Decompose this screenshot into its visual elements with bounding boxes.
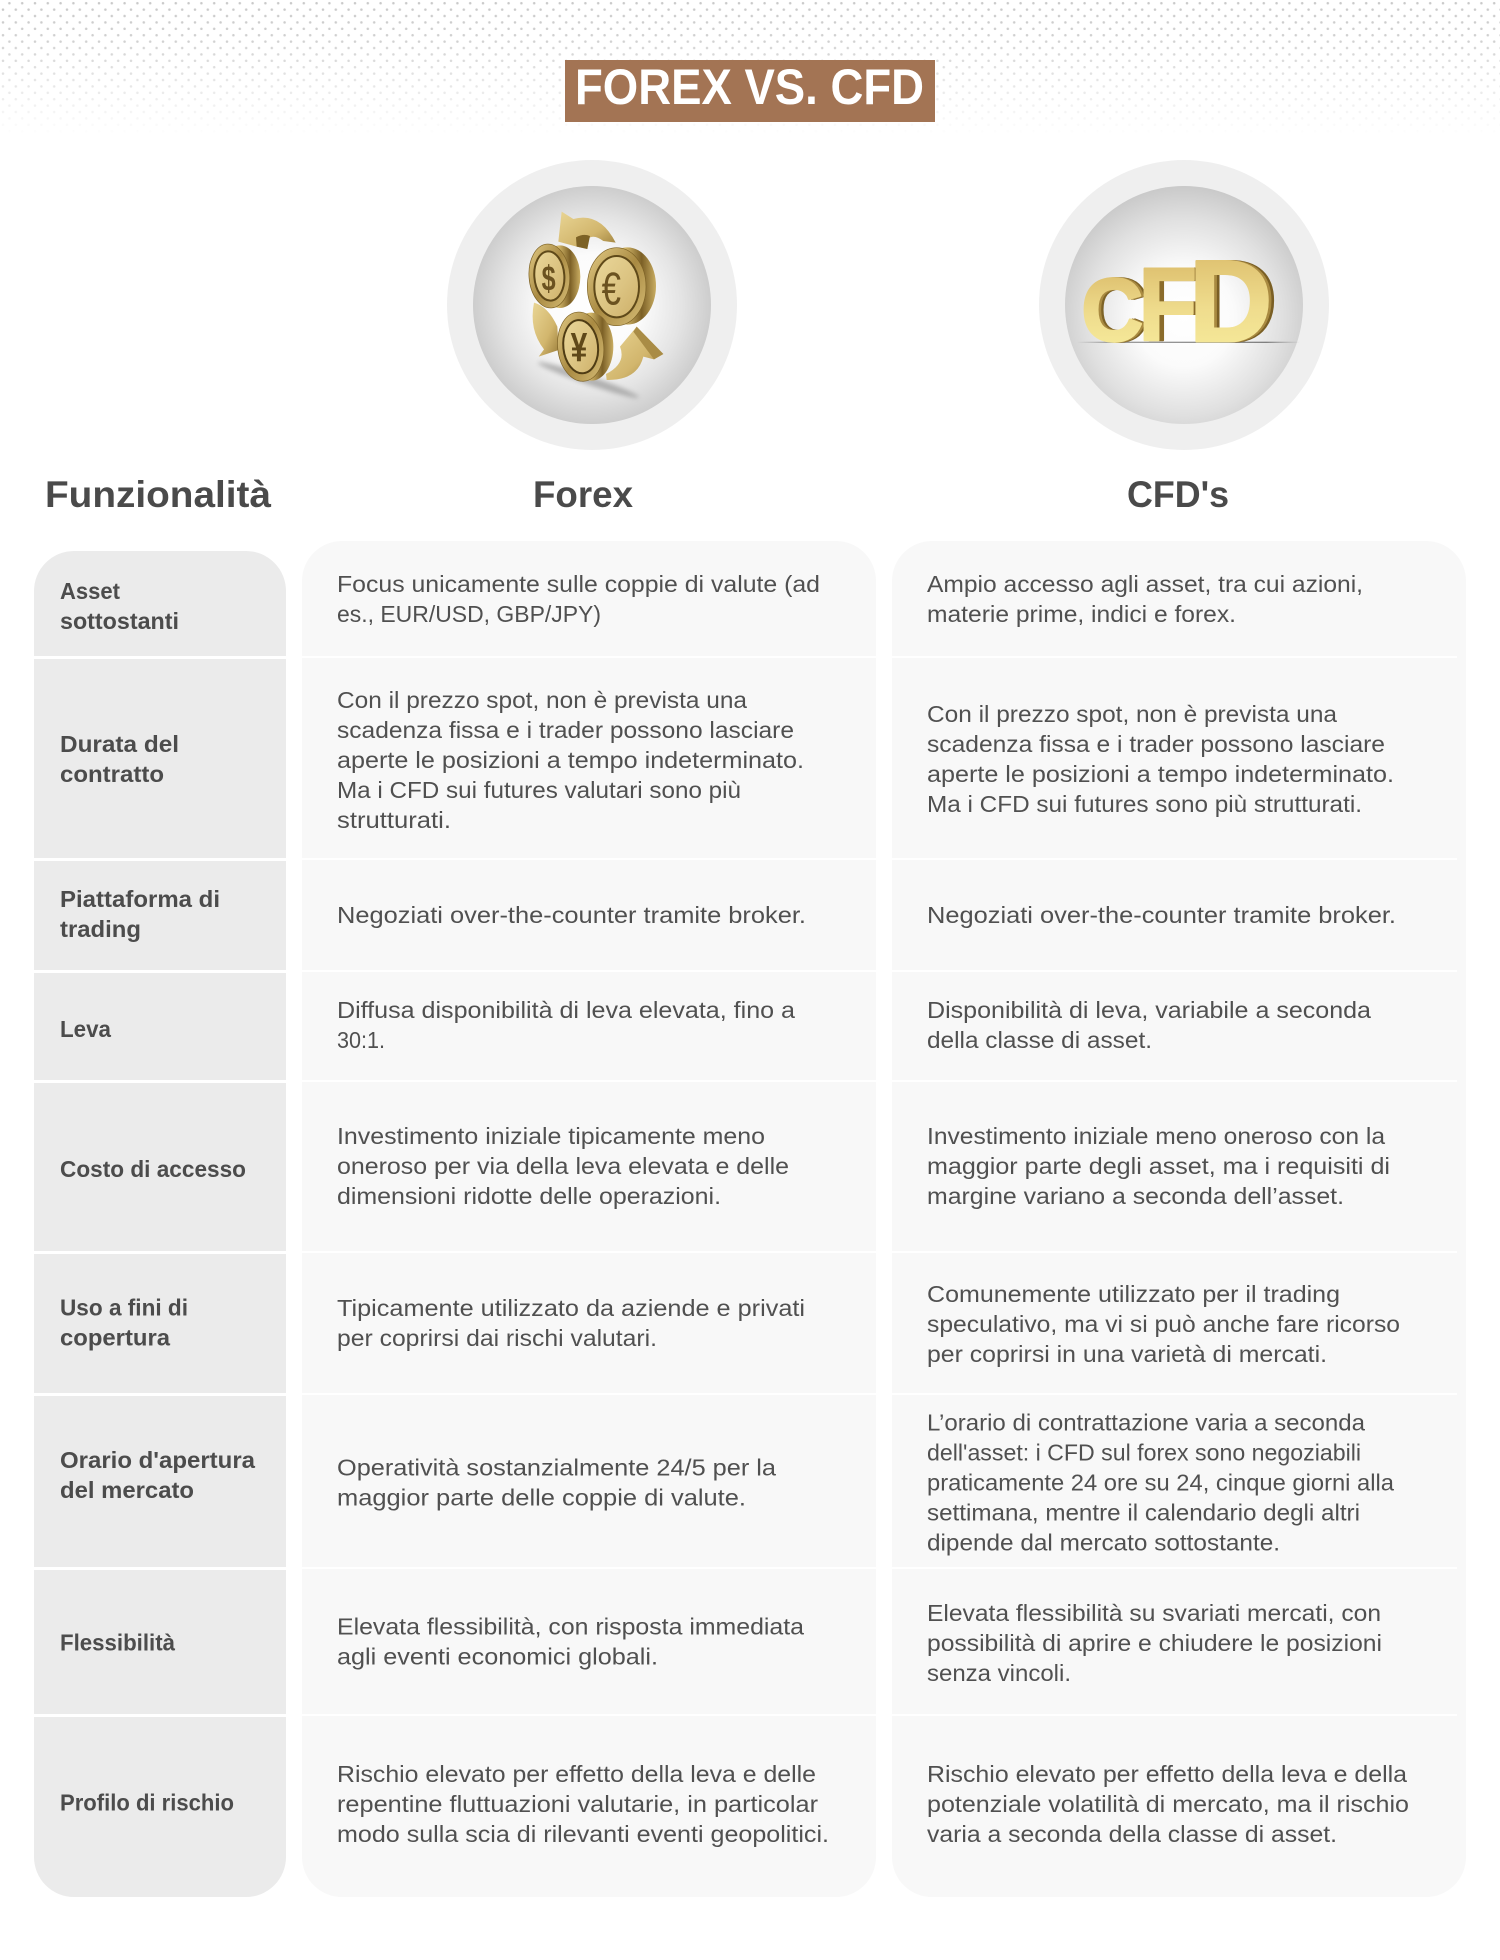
text: Forex durata del contratto <box>337 687 804 833</box>
text: CFD piattaforma: Negoziati over-the-counter tramite broker. <box>927 902 1396 928</box>
text: CFD profilo di rischio: varia a seconda della classe di asset. <box>927 1821 1337 1847</box>
panel: Funzionalità column <box>34 551 286 1897</box>
text: CFD profilo di rischio: Rischio elevato per effetto della leva e della <box>927 1761 1407 1787</box>
text: CFD uso a fini di copertura: speculativo, ma vi si può anche fare ricorso <box>927 1311 1400 1337</box>
text: CFD costo di accesso: maggior parte degli asset, ma i requisiti di <box>927 1153 1390 1179</box>
text: CFD leva: Disponibilità di leva, variabile a seconda <box>927 997 1371 1023</box>
text: Forex leva: Diffusa disponibilità di leva elevata, fino a <box>337 997 795 1023</box>
text: Forex piattaforma: Negoziati over-the-counter tramite broker. <box>337 902 806 928</box>
text: CFD durata del contratto: Ma i CFD sui futures sono più strutturati. <box>927 791 1362 817</box>
icon: CFD gold letters: C <box>1084 259 1146 359</box>
text: Forex leva: 30:1. <box>337 1027 385 1053</box>
text: Forex asset sottostanti: Focus unicamente sulle coppie di valute (ad <box>337 571 820 597</box>
heading: CFD's: CFD's <box>1127 474 1229 515</box>
icon: CFD gold letters: F <box>1143 248 1202 364</box>
text: CFD flessibilità <box>927 1600 1382 1686</box>
text: CFD uso a fini di copertura: Comunemente utilizzato per il trading <box>927 1281 1340 1307</box>
row label: Leva: Leva <box>60 1016 111 1042</box>
text: Forex uso a fini di copertura <box>337 1295 805 1351</box>
row label: Flessibilità: Flessibilità <box>60 1630 175 1656</box>
row label: Piattaforma di trading: trading <box>60 916 141 942</box>
text: CFD asset sottostanti <box>927 571 1363 627</box>
text: Forex orario di apertura: Operatività sostanzialmente 24/5 per la <box>337 1454 776 1480</box>
text: CFD orario di apertura: dell'asset: i CFD sul forex sono negoziabili <box>927 1440 1361 1466</box>
text: CFD flessibilità: Elevata flessibilità su svariati mercati, con <box>927 1600 1381 1626</box>
text: Forex uso a fini di copertura: per coprirsi dai rischi valutari. <box>337 1325 657 1351</box>
icon: CFD gold letters: D <box>1191 235 1275 366</box>
text: CFD durata del contratto: scadenza fissa e i trader possono lasciare <box>927 731 1385 757</box>
row label: Piattaforma di trading: Piattaforma di <box>60 886 220 912</box>
icon: CFD gold letters: C <box>1081 259 1143 359</box>
icon: forex coins: $ <box>542 260 556 299</box>
row label: Profilo di rischio: Profilo di rischio <box>60 1790 234 1816</box>
panel: Forex column <box>302 541 876 1897</box>
row label: Asset sottostanti <box>60 578 179 634</box>
text: CFD flessibilità: possibilità di aprire e chiudere le posizioni <box>927 1630 1382 1656</box>
text: CFD costo di accesso: Investimento iniziale meno oneroso con la <box>927 1123 1385 1149</box>
row label: Asset sottostanti: Asset <box>60 578 120 604</box>
row label: Piattaforma di trading <box>60 886 220 942</box>
text: Forex uso a fini di copertura: Tipicamente utilizzato da aziende e privati <box>337 1295 805 1321</box>
row label: Uso a fini di copertura: copertura <box>60 1324 170 1350</box>
row label: Durata del contratto <box>60 731 179 787</box>
icon: forex coins: € <box>602 262 621 314</box>
text: Forex orario di apertura <box>337 1454 776 1510</box>
text: CFD costo di accesso <box>927 1123 1390 1209</box>
row label: Orario d'apertura del mercato: del mercato <box>60 1477 194 1503</box>
heading: Forex: Forex <box>533 474 633 515</box>
text: CFD orario di apertura: dipende dal mercato sottostante. <box>927 1530 1280 1556</box>
text: Forex costo di accesso: dimensioni ridotte delle operazioni. <box>337 1183 721 1209</box>
text: CFD profilo di rischio: potenziale volatilità di mercato, ma il rischio <box>927 1791 1409 1817</box>
text: CFD asset sottostanti: Ampio accesso agli asset, tra cui azioni, <box>927 571 1363 597</box>
icon: CFD gold letters: D <box>1189 235 1273 366</box>
text: Forex durata del contratto: Ma i CFD sui futures valutari sono più <box>337 777 741 803</box>
title: FOREX VS. CFD <box>575 59 924 115</box>
row label: Uso a fini di copertura <box>60 1294 188 1350</box>
text: Forex flessibilità <box>337 1614 804 1670</box>
row label: Uso a fini di copertura: Uso a fini di <box>60 1294 188 1320</box>
text: Forex costo di accesso: Investimento iniziale tipicamente meno <box>337 1123 765 1149</box>
icon: forex coins: ¥ <box>571 324 588 370</box>
icon: CFD gold letters: D <box>1194 235 1278 366</box>
text: CFD uso a fini di copertura: per coprirsi in una varietà di mercati. <box>927 1341 1327 1367</box>
text: Forex durata del contratto: Con il prezzo spot, non è prevista una <box>337 687 747 713</box>
text: Forex flessibilità: agli eventi economici globali. <box>337 1644 658 1670</box>
icon: CFD gold letters: C <box>1086 259 1148 359</box>
text: Forex durata del contratto: aperte le posizioni a tempo indeterminato. <box>337 747 804 773</box>
text: CFD orario di apertura: settimana, mentre il calendario degli altri <box>927 1500 1360 1526</box>
text: CFD costo di accesso: margine variano a seconda dell’asset. <box>927 1183 1344 1209</box>
text: Forex asset sottostanti: es., EUR/USD, GBP/JPY) <box>337 601 601 627</box>
text: CFD durata del contratto: aperte le posizioni a tempo indeterminato. <box>927 761 1394 787</box>
text: CFD leva: della classe di asset. <box>927 1027 1152 1053</box>
text: CFD leva <box>927 997 1371 1053</box>
text: Forex costo di accesso: oneroso per via della leva elevata e delle <box>337 1153 789 1179</box>
text: CFD durata del contratto <box>927 701 1394 817</box>
heading: Funzionalità: Funzionalità <box>45 474 271 515</box>
text: Forex leva <box>337 997 795 1053</box>
text: Forex orario di apertura: maggior parte delle coppie di valute. <box>337 1484 746 1510</box>
icon: forex coins <box>447 160 737 450</box>
text: Forex asset sottostanti <box>337 571 820 627</box>
text: CFD profilo di rischio <box>927 1761 1409 1847</box>
text: CFD orario di apertura: praticamente 24 ore su 24, cinque giorni alla <box>927 1470 1394 1496</box>
row label: Durata del contratto: Durata del <box>60 731 179 757</box>
text: Forex profilo di rischio <box>337 1761 829 1847</box>
icon: CFD gold letters <box>1039 160 1329 450</box>
text: CFD flessibilità: senza vincoli. <box>927 1660 1071 1686</box>
text: CFD orario di apertura: L’orario di contrattazione varia a seconda <box>927 1410 1365 1436</box>
text: Forex profilo di rischio: repentine fluttuazioni valutarie, in particolar <box>337 1791 818 1817</box>
row label: Orario d'apertura del mercato: Orario d'apertura <box>60 1447 255 1473</box>
text: Forex flessibilità: Elevata flessibilità, con risposta immediata <box>337 1614 804 1640</box>
text: Forex costo di accesso <box>337 1123 789 1209</box>
row label: Orario d'apertura del mercato <box>60 1447 255 1503</box>
text: CFD orario di apertura <box>927 1410 1394 1556</box>
row label: Costo di accesso: Costo di accesso <box>60 1156 246 1182</box>
row label: Durata del contratto: contratto <box>60 761 164 787</box>
text: CFD uso a fini di copertura <box>927 1281 1400 1367</box>
icon: CFD gold letters: F <box>1138 248 1197 364</box>
text: Forex profilo di rischio: Rischio elevato per effetto della leva e delle <box>337 1761 816 1787</box>
text: CFD durata del contratto: Con il prezzo spot, non è prevista una <box>927 701 1337 727</box>
panel: CFD's column <box>892 541 1466 1897</box>
text: Forex durata del contratto: scadenza fissa e i trader possono lasciare <box>337 717 794 743</box>
text: CFD asset sottostanti: materie prime, indici e forex. <box>927 601 1236 627</box>
row label: Asset sottostanti: sottostanti <box>60 608 179 634</box>
text: Forex profilo di rischio: modo sulla scia di rilevanti eventi geopolitici. <box>337 1821 829 1847</box>
text: Forex durata del contratto: strutturati. <box>337 807 451 833</box>
